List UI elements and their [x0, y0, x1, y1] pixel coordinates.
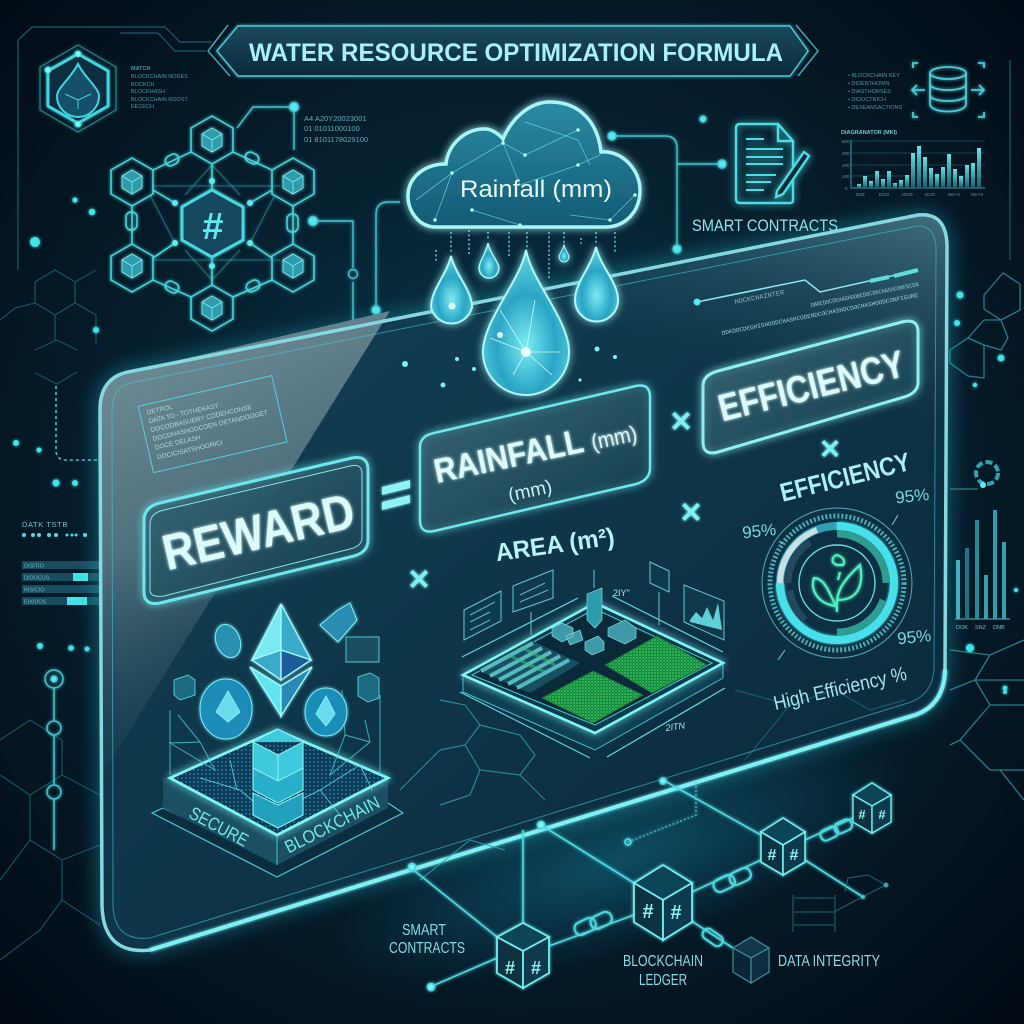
bar chart top right: 0 [845, 186, 848, 191]
database legend text: • DEXEANSACTIONS [848, 105, 903, 111]
floating chart cards [464, 562, 724, 640]
right bar chart [950, 462, 1010, 631]
rainfall box: (mm) [506, 477, 554, 506]
panel header text right: HOCKCHAINTER [734, 289, 786, 307]
block 1: # [505, 958, 515, 978]
icon: smart contract document [736, 124, 809, 203]
binary readout: 01 8101178029100 [304, 135, 368, 144]
bar chart top right: DIIS [856, 192, 865, 197]
multiply sign 3: × [680, 491, 702, 532]
small legend text top left: BLOCKCHAIN NODES [131, 74, 188, 80]
ethereum diamond [250, 604, 312, 716]
efficiency box [703, 321, 918, 453]
right bar chart: DOK [956, 625, 968, 631]
background hexagon network left [0, 270, 100, 960]
small legend text top left: MATCH [131, 66, 150, 72]
label: blockchain: BLOCKCHAIN [281, 792, 383, 857]
decorative glow dots [13, 197, 1018, 694]
data status bars: RISICIO [24, 588, 45, 594]
panel header text right: DDKDOCDEGHISHOODCHASHCODENDCOCHASHDCDOCHASHOODCONFIGURE [721, 292, 919, 337]
right bar chart: DNB [993, 625, 1005, 631]
data status bars: DISITIO [24, 564, 45, 570]
title banner [18, 25, 1010, 270]
block 2: # [670, 902, 682, 924]
data status bars: EIXIDOS [24, 600, 47, 606]
panel header text left: DOCICISATSHOORICI [157, 439, 224, 461]
label: blockchain ledger: LEDGER [639, 972, 687, 989]
small legend text top left: BLOCKHASH [131, 89, 165, 95]
status node icons left [45, 670, 63, 850]
panel header text left: DETROL [146, 404, 174, 417]
label: data integrity: DATA INTEGRITY [778, 953, 880, 970]
gauge percentage labels: 95% [741, 520, 777, 543]
binary readout: A4 A20Y20023001 [304, 114, 367, 123]
small legend text top left: BOCKCH [131, 82, 155, 88]
database legend text [848, 73, 903, 111]
secure blockchain platform [152, 102, 1010, 990]
small legend text top left [131, 66, 188, 110]
dim data block [733, 937, 769, 983]
efficiency gauge [762, 508, 912, 660]
area label: AREA (m²) [494, 523, 616, 567]
isometric area map: 2ITN [664, 720, 686, 733]
small droplets [402, 346, 617, 388]
isometric area map: 2IY" [613, 588, 630, 598]
panel header text left [138, 376, 287, 473]
rainfall box [420, 385, 650, 532]
panel inner hex lines [400, 690, 905, 880]
stacked blocks [253, 729, 303, 828]
high efficiency label: High Efficiency % [771, 663, 909, 715]
bar chart top right: DDIS [902, 192, 913, 197]
binary readout [304, 114, 368, 144]
icon: leaf sprout [813, 555, 861, 612]
multiply sign 2: × [820, 430, 840, 468]
panel header text left: DATA TO - TOTHEKASY [148, 402, 220, 425]
label: blockchain ledger: BLOCKCHAIN [623, 953, 703, 970]
data status bars: DATK TSTB [22, 520, 68, 529]
database legend text: • BLOCKCHAIN KEY [848, 73, 900, 79]
block 4: # [878, 807, 886, 822]
floating coins [200, 603, 357, 739]
label: smart contracts bottom: CONTRACTS [389, 940, 465, 957]
multiply sign 4: × [408, 558, 430, 599]
gauge percentage labels [741, 485, 932, 649]
faint data grid right of blockchain ledger [793, 875, 888, 932]
gauge percentage labels: 95% [894, 485, 930, 508]
bar chart top right: DOO [925, 192, 936, 197]
data status bars [22, 520, 100, 606]
glass panel [100, 215, 947, 950]
bar chart top right: DEYS [971, 192, 983, 197]
small legend text top left: BLOCKCHAIN ROOST [131, 97, 188, 103]
bar chart top right [841, 130, 985, 197]
bar chart top right: DEYS [948, 192, 960, 197]
reward text: REWARD [157, 483, 360, 581]
block 3 [761, 818, 805, 875]
database legend text: • DIASTHORSES [848, 89, 891, 95]
multiply sign 1: × [670, 400, 692, 441]
icon: water drop hexagon [40, 45, 116, 132]
center hash hexagon: # [202, 206, 224, 248]
rain streams [436, 230, 615, 278]
buildings [552, 588, 636, 655]
connector lines [237, 102, 726, 320]
binary readout: 01 01011000100 [304, 124, 360, 133]
bottom chain links [408, 778, 863, 990]
efficiency label: EFFICIENCY [777, 446, 913, 508]
panel header text right [694, 270, 920, 337]
database legend text: • DIDENTHOWN [848, 81, 889, 87]
efficiency text: EFFICIENCY [714, 344, 909, 430]
small legend text top left: EECECH [131, 104, 154, 110]
floating blocks [174, 637, 379, 702]
block 2 [634, 865, 692, 940]
rainfall text: RAINFALL (mm) [431, 411, 640, 491]
block 2: # [642, 901, 654, 923]
crop rows [477, 640, 580, 693]
center hash hexagon [182, 190, 243, 257]
block 4 [853, 783, 891, 833]
data status bars: DIDOCUS [24, 576, 50, 582]
panel header text left: DOCDHASHODCOEN OETANDOOGET [152, 410, 268, 443]
green field south [542, 671, 643, 723]
label: smart contracts: SMART CONTRACTS [692, 216, 838, 235]
hexagonal blockchain network [111, 116, 314, 331]
bar chart top right: 500 [842, 139, 850, 144]
bar chart top right: DOO [879, 192, 890, 197]
title: WATER RESOURCE OPTIMIZATION FORMULA [249, 39, 783, 67]
green field east [605, 636, 707, 693]
database legend text: • DIDOCTRICH [848, 97, 886, 103]
label: secure: SECURE [186, 803, 252, 851]
background hexagon network right [950, 273, 1024, 800]
label: blockchain ledger [623, 953, 703, 989]
panel header text right: DBOCDOCDEHASHOODCDOCODCHASHCONFDCDN [810, 281, 920, 309]
bar chart top right: DIAGRANATOR (MKI) [841, 130, 897, 136]
water drops [431, 243, 618, 395]
bar chart top right: 200 [842, 163, 850, 168]
block 4: # [858, 807, 866, 822]
panel gloss reflection [100, 311, 390, 775]
reward box [144, 458, 368, 604]
gauge percentage labels: 95% [896, 626, 932, 649]
panel header text left: DOCODBASUERY CODEHCONSE [150, 404, 253, 434]
icon: database [912, 63, 984, 117]
right bar chart: SNZ [975, 625, 987, 631]
block 1: # [531, 958, 541, 978]
block 1 [497, 923, 549, 988]
panel header text left: DOCE DELASH [154, 434, 202, 452]
label: smart contracts bottom [389, 922, 465, 957]
bar chart top right: 300 [842, 151, 850, 156]
dotted data connector left [56, 386, 98, 460]
cloud [408, 102, 640, 227]
block 3: # [790, 847, 799, 864]
isometric area map [460, 562, 725, 758]
equals sign [382, 480, 410, 510]
block 3: # [768, 847, 777, 864]
cloud label: Rainfall (mm) [460, 176, 612, 203]
label: smart contracts bottom: SMART [402, 922, 446, 939]
bar chart top right: 100 [842, 174, 850, 179]
